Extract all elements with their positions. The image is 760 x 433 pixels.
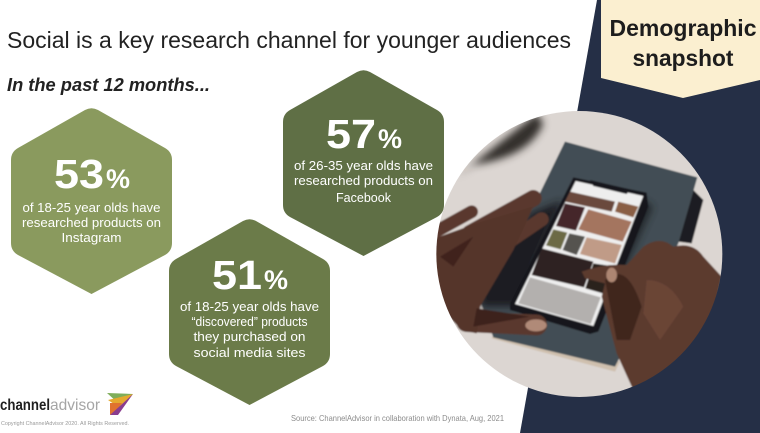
- hexagon: 53% Instagram: [11, 108, 172, 294]
- copyright: Copyright ChannelAdvisor 2020. All Rights Reserved.: [1, 421, 129, 427]
- hexagon: 53% Instagram: %: [106, 164, 130, 194]
- banner: demographic snapshot: Demographic: [610, 15, 757, 41]
- hexagon: 51% social media sites: social media sites: [194, 346, 306, 360]
- screen photos: [565, 192, 615, 212]
- banner: demographic snapshot: snapshot: [632, 45, 734, 71]
- subtitle: In the past 12 months...: [7, 75, 210, 95]
- hexagon: 53% Instagram: of 18-25 year olds have: [22, 201, 161, 215]
- stone surface: [440, 111, 722, 397]
- hexagon: 51% social media sites: 51: [212, 252, 262, 298]
- hexagon: 57% Facebook: %: [378, 124, 402, 154]
- notch: [590, 180, 630, 194]
- hexagon: 57% Facebook: researched products on: [294, 174, 433, 188]
- hexagon: 57% Facebook: of 26-35 year olds have: [294, 159, 433, 173]
- hexagon: 53% Instagram: researched products on: [22, 216, 161, 230]
- right hand: [582, 241, 722, 390]
- shadow top left: [457, 113, 543, 177]
- shadow under hands: [480, 200, 563, 307]
- hexagon: 51% social media sites: “discovered” products: [192, 315, 308, 329]
- hexagon: 51% social media sites: they purchased on: [194, 330, 306, 344]
- logo: channeladvisor: advisor: [50, 397, 101, 414]
- notebook page edge: [492, 336, 620, 372]
- navy side panel: [520, 0, 760, 433]
- hexagon: 57% Facebook: [283, 70, 444, 256]
- title: Social is a key research channel for younger audiences: [7, 27, 571, 53]
- hexagon: 51% social media sites: %: [264, 265, 288, 295]
- left hand: [427, 198, 542, 325]
- phone screen: [515, 181, 643, 326]
- logo: channeladvisor: [0, 393, 133, 415]
- hexagon: 57% Facebook: 57: [326, 111, 376, 157]
- phone body: [510, 177, 648, 334]
- source note: Source: ChannelAdvisor in collaboration with Dynata, Aug, 2021: [291, 413, 504, 423]
- hexagon: 57% Facebook: Facebook: [336, 191, 392, 205]
- hexagon: 51% social media sites: [169, 219, 330, 405]
- banner: demographic snapshot: [601, 0, 760, 98]
- notebook: [480, 142, 697, 367]
- hexagon: 53% Instagram: Instagram: [62, 231, 122, 245]
- logo: channeladvisor: channel: [0, 397, 50, 414]
- strap on the right: [678, 190, 703, 243]
- photo: hands holding a smartphone on a notebook: [436, 111, 722, 397]
- hexagon: 53% Instagram: 53: [54, 151, 104, 197]
- icon: multicolor arrow: [107, 393, 133, 415]
- hexagon: 51% social media sites: of 18-25 year olds have: [180, 300, 319, 314]
